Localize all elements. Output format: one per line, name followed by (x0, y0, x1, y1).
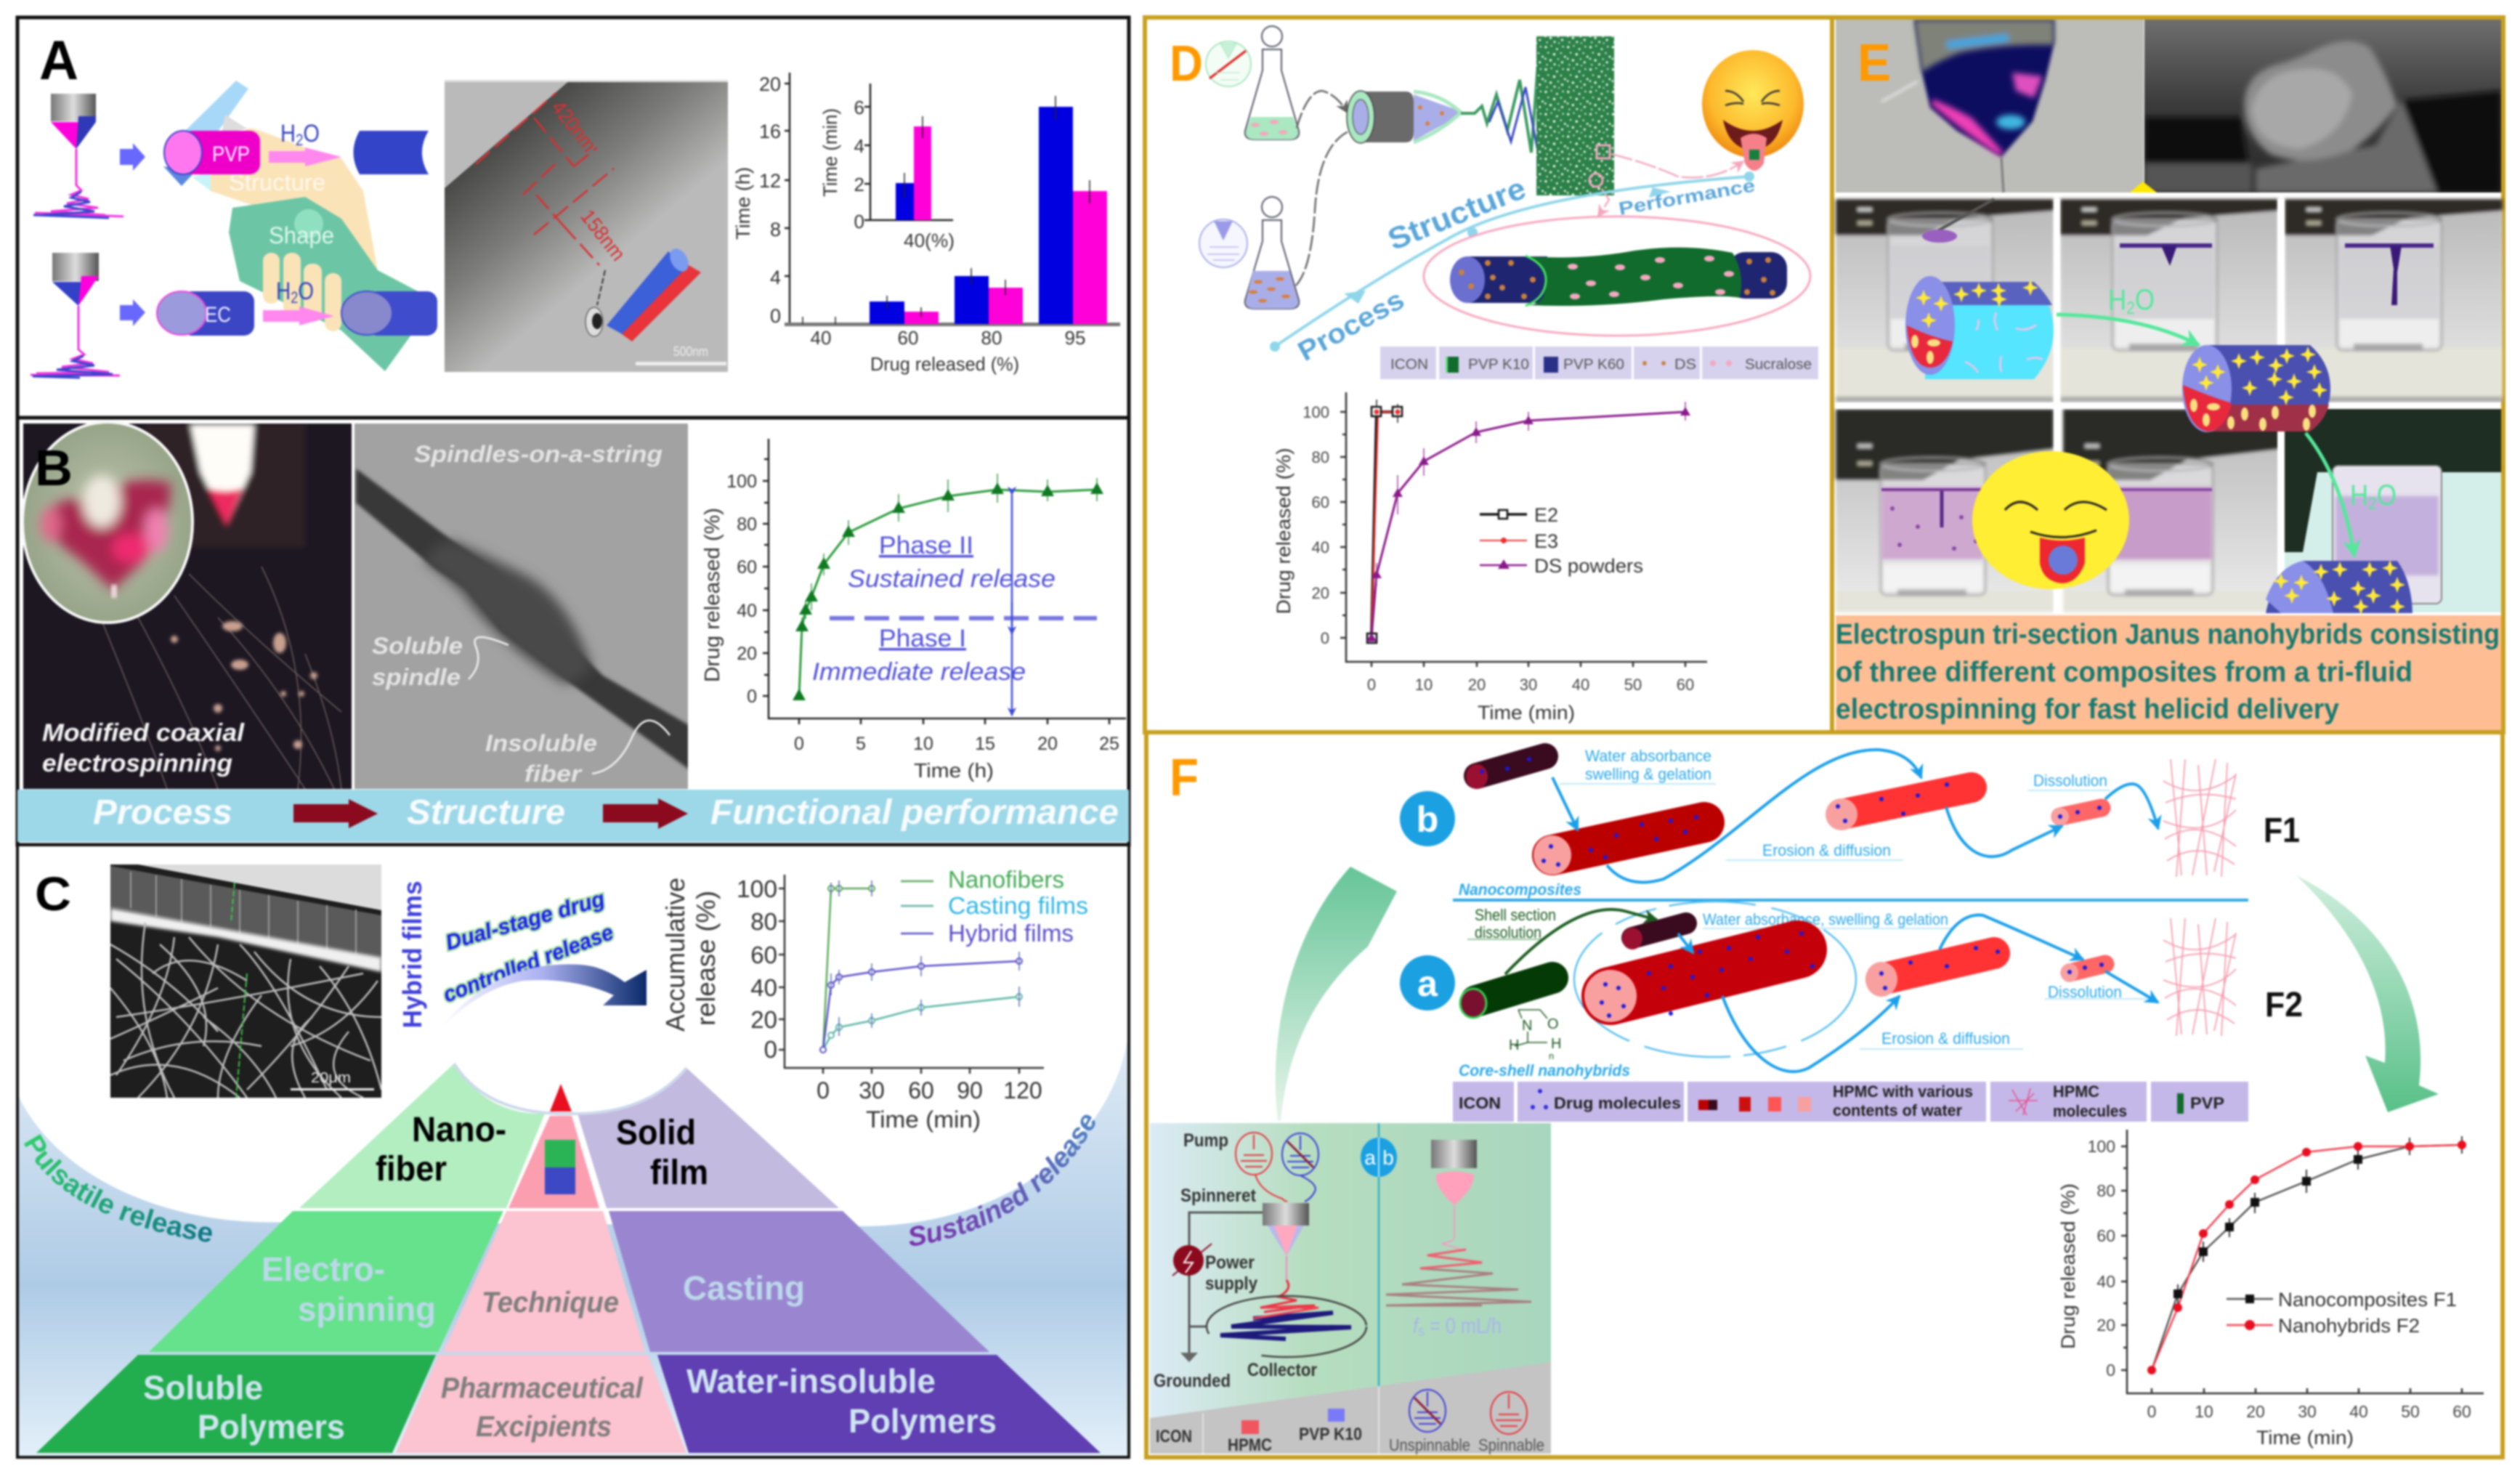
PVP chemical structure: H (1551, 1036, 1561, 1052)
PVP chemical structure: n (1549, 1050, 1554, 1061)
white bowl background (19, 846, 1127, 1226)
pyramid labels: Nano- (412, 1111, 506, 1149)
upper pathway labels (1459, 747, 2110, 899)
lower pathway arrows (1678, 915, 2158, 1072)
inset legend: HPMC (1228, 1435, 1272, 1455)
release chart F: 20 (2096, 1316, 2115, 1335)
F1 and F2 labels: F2 (2265, 986, 2303, 1024)
SEM image of hybrid film (110, 864, 381, 1098)
release chart B: 0 (794, 734, 804, 754)
release chart D: 40 (1572, 676, 1589, 694)
HPMC meshes (2163, 759, 2236, 1036)
release chart B: 20 (1037, 734, 1058, 754)
release chart D: 50 (1624, 676, 1642, 694)
dual-stage annotation: Dual-stage drug (443, 887, 607, 955)
curved labels: Pulsatile release (23, 1133, 214, 1244)
release chart B: Phase II (879, 532, 973, 559)
release chart F: 60 (2452, 1402, 2471, 1421)
water arrows: H (2350, 479, 2371, 511)
bar chart A: Drug released (%) (870, 353, 1019, 375)
inset legend: Spinnable (1478, 1435, 1544, 1454)
setup labels (1154, 1130, 1317, 1391)
legend chart F: Nanohybrids F2 (2278, 1315, 2420, 1337)
release chart D: 0 (1321, 629, 1329, 647)
release chart F: 60 (2096, 1226, 2115, 1245)
lower pathway labels: Erosion & diffusion (1881, 1029, 2010, 1048)
setup labels: supply (1205, 1273, 1257, 1294)
F1 and F2 labels (2264, 811, 2303, 1024)
nanocomposite cylinders (1466, 756, 2102, 875)
release chart F: 0 (2106, 1361, 2115, 1380)
down arrow (2296, 875, 2439, 1112)
bar chart A: 16 (759, 121, 781, 142)
laughing emoji (1702, 50, 1804, 171)
heading B: B (35, 440, 73, 496)
inset bar chart A: Time (min) (819, 108, 841, 197)
electrospinning photograph (23, 422, 352, 789)
pyramid labels (143, 1111, 997, 1446)
setup labels: Pump (1183, 1130, 1228, 1151)
yellow smiley (1972, 451, 2129, 589)
bar chart A: 0 (770, 305, 781, 327)
process banner: Process (93, 793, 232, 832)
pyramid labels: Polymers (848, 1402, 997, 1440)
taste link arrows (1598, 154, 1743, 216)
upper pathway labels: Water absorbance (1585, 747, 1711, 765)
badge a (1400, 955, 1455, 1011)
release chart C: 0 (764, 1036, 777, 1063)
release chart D: 80 (1312, 448, 1329, 466)
flow rate note: S (1418, 1327, 1425, 1339)
legend D: ICON (1390, 357, 1428, 373)
legend F: PVP (2190, 1094, 2224, 1112)
pyramid labels: Electro- (262, 1250, 385, 1288)
unspinnable nozzle (1386, 1140, 1531, 1305)
fiber mat (1536, 36, 1614, 195)
H2O with arrow bottom: 2 (291, 288, 298, 307)
power circuit (1172, 1212, 1263, 1362)
SEM of Janus fiber cross section (2144, 20, 2501, 193)
process-structure-performance curve (1270, 171, 1757, 368)
release chart C: 80 (750, 908, 777, 935)
SEM image of hybrid film: 20μm (311, 1070, 351, 1086)
TEM spindle image: fiber (524, 761, 583, 787)
inset legend (1156, 1390, 1544, 1455)
badge b (1400, 791, 1455, 846)
release chart B (701, 439, 1126, 782)
process icons (1199, 41, 1251, 267)
water arrows: O (2135, 284, 2155, 316)
release chart F: 80 (2096, 1181, 2115, 1200)
release chart D: 100 (1302, 403, 1329, 421)
release chart D: 10 (1415, 676, 1433, 694)
release chart B: 25 (1099, 734, 1119, 754)
cylinder EC: EC (205, 303, 231, 327)
release chart F: Drug released (%) (2057, 1183, 2079, 1349)
spinneret 2 (31, 253, 120, 378)
release chart F: 30 (2298, 1402, 2317, 1421)
TEM image with dimension marks (445, 80, 728, 372)
heading D: D (1170, 35, 1203, 92)
Janus cylinder with water-soluble shell (1905, 276, 2054, 379)
release chart C: Accumulative (660, 878, 690, 1032)
coaxial spinneret and jet (1347, 54, 1544, 182)
shell section dissolution label (1467, 906, 1556, 942)
legend F: Drug molecules (1554, 1094, 1681, 1112)
hands illustration: Structure (229, 169, 325, 195)
pyramid labels: Technique (482, 1287, 619, 1319)
legend D: PVP K10 (1468, 357, 1529, 373)
flask 2 (1245, 197, 1299, 309)
bar chart A: 4 (770, 267, 781, 288)
beaker time-lapse photos (1836, 199, 2503, 613)
release chart C: 40 (750, 974, 777, 1001)
pump icons (1236, 1133, 1318, 1202)
H2O with arrow top: 2 (296, 131, 303, 149)
process-structure-performance curve: Structure (1383, 171, 1531, 256)
arrows from spinnerets (120, 143, 145, 326)
H2O with arrow bottom: O (298, 278, 314, 305)
collector with fibers (1207, 1296, 1366, 1357)
core-shell cylinders (1460, 902, 2105, 1057)
heading F: F (1170, 749, 1199, 807)
pyramid labels: Pharmaceutical (441, 1372, 644, 1404)
release chart B: Drug released (%) (701, 508, 724, 682)
blue cylinder end (341, 291, 437, 336)
legend F: ICON (1459, 1094, 1501, 1112)
janus fiber in ellipse (1424, 216, 1810, 336)
heading A: A (39, 30, 78, 92)
release chart B: 80 (737, 514, 757, 535)
badge ab: b (1382, 1146, 1394, 1169)
electrospinning setup inset (1150, 1123, 1551, 1455)
release chart F: 0 (2147, 1402, 2156, 1421)
water arrows (2057, 284, 2397, 556)
upper pathway labels: Nanocomposites (1459, 880, 1581, 899)
process banner: Functional performance (710, 793, 1119, 832)
legend chart F (2227, 1289, 2457, 1337)
release chart C: 100 (737, 875, 777, 902)
legend C (901, 866, 1088, 947)
panel D: fast dissolving taste masked fibers (1145, 17, 1832, 732)
bar chart A: 95 (1065, 327, 1085, 349)
release chart F: Time (min) (2256, 1427, 2354, 1449)
caption E: of three different composites from a tri-fluid (1836, 657, 2412, 688)
spinneret 1 (33, 94, 123, 218)
pyramid labels: spinning (298, 1290, 436, 1328)
panel B: process structure performance (17, 418, 1129, 845)
lower pathway labels: Water absorbance, swelling & gelation (1703, 910, 1948, 928)
upper pathway labels: Dissolution (2033, 772, 2107, 790)
release chart F: 10 (2195, 1402, 2213, 1421)
release chart D: 20 (1468, 676, 1486, 694)
H2O with arrow top: H (280, 120, 299, 147)
legend D: DS (1674, 357, 1696, 373)
setup labels: Spinneret (1180, 1186, 1257, 1206)
release chart C: 120 (1003, 1077, 1042, 1104)
release chart D: 0 (1367, 676, 1376, 694)
pyramid labels: Casting (683, 1269, 805, 1307)
badge a: a (1417, 963, 1438, 1004)
release chart B: Immediate release (812, 658, 1026, 686)
release chart B: Sustained release (848, 565, 1056, 593)
release chart B: 100 (726, 471, 757, 492)
release chart D: 40 (1312, 538, 1329, 556)
setup labels: Power (1205, 1252, 1255, 1273)
photo caption: Modified coaxial (42, 719, 246, 747)
PVP chemical structure (1509, 1010, 1561, 1061)
release chart D: Drug released (%) (1273, 448, 1295, 615)
process banner (17, 790, 1129, 842)
bar chart A: Time (h) (732, 167, 754, 240)
lower pathway labels: Core-shell nanohybrids (1459, 1061, 1630, 1080)
release chart D: Time (min) (1478, 702, 1575, 724)
spinneret with cone (1260, 1203, 1315, 1312)
dual-stage annotation: controlled release (440, 920, 617, 1008)
release chart D: 60 (1312, 493, 1329, 511)
water arrows: 2 (2126, 299, 2135, 318)
badge ab (1361, 1138, 1397, 1177)
setup labels: Grounded (1154, 1371, 1231, 1391)
flask 1 (1245, 26, 1299, 139)
panel A: shape and structure with bar chart (17, 17, 1129, 418)
release chart C: 60 (908, 1077, 934, 1104)
bar chart A: 12 (759, 170, 781, 192)
H2O with arrow top: O (303, 120, 320, 147)
release chart F: 50 (2401, 1402, 2420, 1421)
upper pathway arrows (1552, 750, 2158, 883)
pyramid labels: Excipients (476, 1411, 612, 1443)
legend C: Nanofibers (948, 866, 1064, 893)
legend D: PVP K60 (1563, 357, 1624, 373)
release chart B: 15 (975, 734, 995, 754)
pyramid labels: Solid (616, 1114, 696, 1152)
pyramid labels: Water-insoluble (686, 1362, 936, 1400)
badge b: b (1417, 799, 1438, 840)
hands illustration: Shape (269, 222, 334, 248)
release chart F: 20 (2246, 1402, 2265, 1421)
lower pathway labels: Dissolution (2048, 983, 2122, 1001)
cylinder EC (157, 291, 254, 336)
release chart C: 30 (859, 1077, 885, 1104)
water arrows: H (2108, 284, 2129, 316)
photo caption (42, 719, 246, 777)
upper pathway labels: Erosion & diffusion (1762, 841, 1891, 859)
legend C: Hybrid films (948, 920, 1074, 947)
water arrows: O (2377, 479, 2397, 511)
legend F: HPMC with various (1833, 1082, 1973, 1101)
release chart C: release (%) (691, 891, 721, 1026)
release chart B: Time (h) (914, 759, 994, 782)
release chart B: 0 (747, 687, 757, 707)
flow rate note: = 0 mL/h (1425, 1314, 1502, 1338)
TEM image with dimension marks: 420nm (547, 97, 601, 156)
legend F (1453, 1082, 2248, 1122)
pyramid (36, 1064, 1101, 1453)
PVP chemical structure: N (1522, 1018, 1532, 1034)
TEM image with dimension marks: 500nm (673, 344, 708, 359)
bar chart A: 8 (770, 219, 781, 240)
bar chart A: 20 (759, 73, 781, 95)
panel C: hybrid films pyramid (15, 845, 1132, 1460)
release chart B: 40 (737, 601, 757, 621)
lower pathway labels (1459, 910, 2150, 1080)
flow rate note: f (1413, 1314, 1419, 1338)
release chart D (1273, 392, 1707, 724)
pyramid labels: fiber (376, 1150, 447, 1188)
release chart F: 100 (2088, 1137, 2115, 1156)
bar chart A (732, 73, 1120, 375)
heading C: C (35, 867, 71, 920)
shell section dissolution label: Shell section (1475, 906, 1556, 924)
inset bar chart A: 2 (854, 174, 864, 195)
yellow marker (2130, 182, 2157, 193)
H2O with arrow top (269, 120, 341, 166)
process-structure-performance curve: Performance (1617, 175, 1757, 219)
F1 and F2 labels: F1 (2264, 811, 2300, 850)
photo of spinning droplet (1836, 20, 2144, 193)
cylinder PVP (164, 131, 260, 174)
hands illustration (163, 81, 436, 371)
TEM image with dimension marks: 158nm (576, 206, 630, 265)
blue half cylinder (353, 131, 429, 174)
H2O with arrow bottom (263, 278, 334, 325)
legend chart D: DS powders (1534, 555, 1643, 577)
TEM spindle image: spindle (372, 664, 461, 690)
PVP chemical structure: O (1547, 1016, 1559, 1032)
legend F: molecules (2053, 1102, 2127, 1120)
legend chart D (1480, 504, 1643, 577)
legend F: HPMC (2053, 1082, 2099, 1101)
release chart B: 60 (737, 557, 757, 578)
tubing connectors (1296, 91, 1350, 286)
TEM spindle image (354, 424, 690, 789)
setup labels: Collector (1247, 1360, 1317, 1380)
release chart D: 30 (1520, 676, 1537, 694)
release chart B: 5 (856, 734, 866, 754)
legend C: Casting films (948, 892, 1088, 919)
PVP chemical structure: H (1509, 1037, 1519, 1053)
inset bar chart A: 4 (854, 135, 864, 157)
pyramid labels: film (650, 1154, 708, 1192)
release chart F (2057, 1130, 2484, 1449)
curved labels: Sustained release (908, 1113, 1097, 1247)
legend D (1380, 347, 1818, 379)
release chart B: 10 (913, 734, 933, 754)
process banner: Structure (407, 793, 565, 832)
legend chart D: E3 (1534, 530, 1558, 552)
separator line (1453, 899, 2248, 902)
inset bar chart A: 40(%) (904, 230, 955, 251)
process-structure-performance curve: Process (1293, 285, 1409, 368)
release chart D: 20 (1312, 584, 1329, 602)
legend F: contents of water (1833, 1101, 1962, 1119)
release chart B: Phase I (879, 625, 966, 652)
caption E (1836, 615, 2501, 730)
release chart C: 0 (817, 1077, 830, 1104)
release chart C: 90 (957, 1077, 983, 1104)
release chart F: 40 (2349, 1402, 2368, 1421)
panel E: tri-section Janus nanohybrids (1832, 17, 2503, 732)
caption E: electrospinning for fast helicid delivery (1836, 694, 2339, 725)
TEM spindle image: Spindles-on-a-string (414, 441, 663, 467)
water arrows: 2 (2368, 494, 2377, 514)
legend D: Sucralose (1745, 357, 1812, 373)
legend chart D: E2 (1534, 504, 1558, 526)
release chart C: 20 (750, 1006, 777, 1033)
inset bar chart A: 6 (854, 97, 864, 118)
release chart C: 60 (750, 942, 777, 968)
up arrow (1276, 867, 1397, 1121)
pyramid labels: Soluble (143, 1369, 263, 1406)
curved arrow (439, 964, 647, 1030)
Janus remaining section (2266, 560, 2412, 615)
TEM spindle image: Insoluble (485, 730, 597, 756)
upper pathway labels: swelling & gelation (1585, 765, 1711, 783)
inset bar chart A (819, 84, 955, 251)
release chart C: Time (min) (866, 1106, 981, 1133)
inset legend: Unspinnable (1389, 1435, 1470, 1454)
curved labels (17, 1108, 1103, 1253)
release chart B: 20 (737, 644, 757, 664)
hybrid films vertical label: Hybrid films (397, 880, 427, 1029)
bar chart A: 60 (898, 327, 918, 349)
photo caption: electrospinning (42, 750, 232, 777)
H2O with arrow bottom: H (276, 278, 294, 305)
release chart D: 60 (1677, 676, 1694, 694)
bar chart A: 80 (981, 327, 1002, 349)
badge ab: a (1364, 1146, 1376, 1169)
panel F: nanocomposites versus nanohybrids (1146, 732, 2503, 1457)
release chart C (660, 875, 1044, 1133)
TEM spindle image: Soluble (372, 633, 463, 659)
cylinder PVP: PVP (212, 142, 250, 166)
Janus cylinder two section (2182, 345, 2330, 432)
pyramid labels: Polymers (198, 1408, 345, 1446)
legend chart F: Nanocomposites F1 (2278, 1289, 2457, 1311)
inset legend: ICON (1156, 1427, 1192, 1446)
shell dissolution arrow (1505, 910, 1657, 974)
shell section dissolution label: dissolution (1475, 923, 1541, 942)
inset bar chart A: 0 (854, 211, 864, 232)
inset legend: PVP K10 (1299, 1425, 1362, 1444)
heading E: E (1857, 34, 1891, 92)
release chart F: 40 (2096, 1272, 2115, 1291)
bar chart A: 40 (811, 327, 831, 349)
